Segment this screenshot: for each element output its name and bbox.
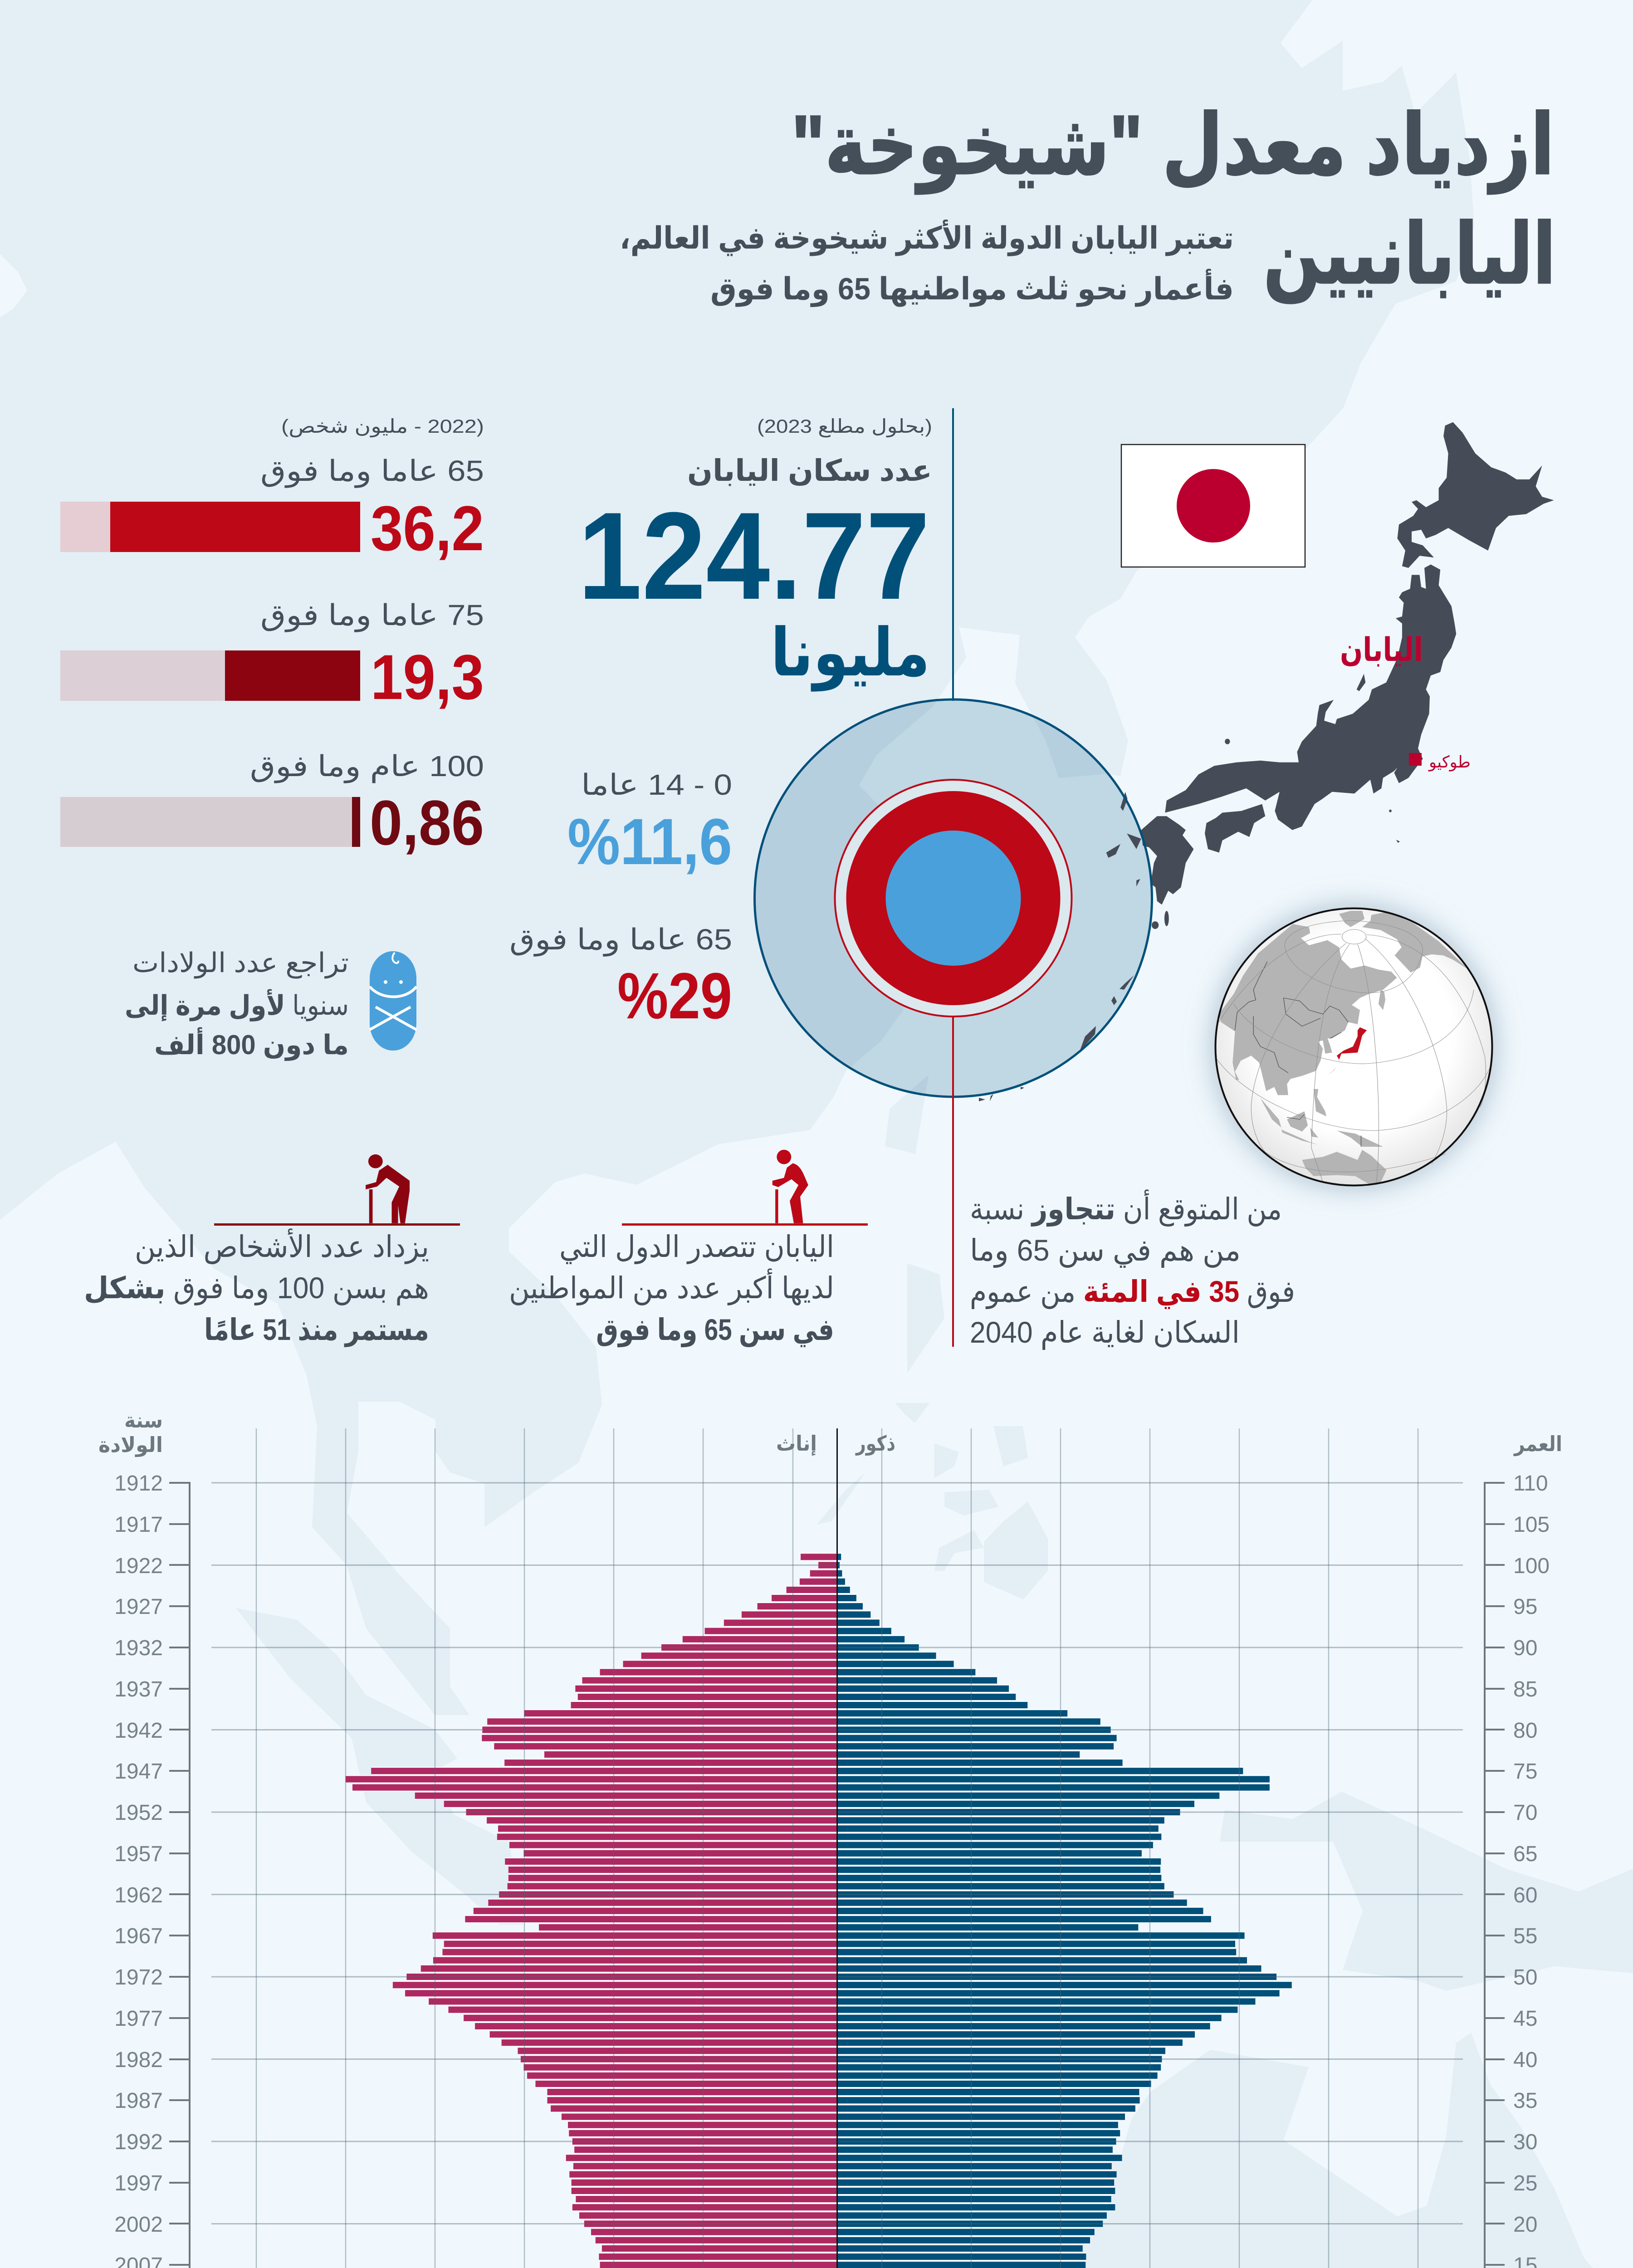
right axis: ages: 90 <box>1513 1636 1537 1660</box>
chart: population pyramid <box>98 1408 1562 2268</box>
text: centenarians: هم بسن 100 وما فوق بشكل <box>84 1271 429 1305</box>
right axis: ages: 80 <box>1513 1719 1537 1743</box>
text: births decline <box>125 948 349 1061</box>
row: 65 and over <box>60 455 484 564</box>
left axis: birth years: 1912 <box>114 1471 163 1496</box>
right axis: ages: 20 <box>1513 2213 1537 2237</box>
text: centenarians <box>84 1228 429 1347</box>
red connector line <box>952 1017 954 1347</box>
axis titles: سنة <box>124 1408 163 1432</box>
left axis: birth years: 1982 <box>114 2048 163 2072</box>
ring: 65 and over <box>846 791 1061 1005</box>
left axis: birth years: 1987 <box>114 2089 163 2113</box>
row: 75 and over <box>60 599 484 713</box>
row: 100 and over: 100 عام وما فوق <box>250 750 484 783</box>
grid <box>211 1428 1463 2268</box>
right axis: ages: 25 <box>1513 2171 1537 2195</box>
right axis: ages: 30 <box>1513 2130 1537 2154</box>
title <box>792 98 1556 304</box>
stat: 0-14: 0 - 14 عاما <box>581 768 732 801</box>
text: Japan tops list: في سن 65 وما فوق <box>596 1313 834 1348</box>
text: births decline: سنويا لأول مرة إلى <box>125 989 349 1022</box>
text: 2040 projection <box>970 1189 1295 1350</box>
map: Japan <box>979 422 1554 1101</box>
subtitle <box>620 219 1234 307</box>
flag of Japan <box>1121 445 1305 567</box>
million label: مليونا <box>771 616 930 692</box>
text: 2040 projection: من المتوقع أن تتجاوز نسبة <box>970 1189 1282 1227</box>
text: centenarians: يزداد عدد الأشخاص الذين <box>135 1228 429 1265</box>
left axis: birth years: 1977 <box>114 2007 163 2031</box>
subtitle: تعتبر اليابان الدولة الأكثر شيخوخة في العالم، <box>620 219 1234 256</box>
right axis: ages: 105 <box>1513 1513 1550 1537</box>
panel: total population <box>578 415 932 692</box>
right axis: ages: 100 <box>1513 1554 1550 1578</box>
stat: 65 and over <box>509 923 732 1032</box>
age distribution circle <box>755 699 1152 1097</box>
left axis: birth years: 1952 <box>114 1801 163 1825</box>
icon: elderly person 2 <box>214 1154 460 1226</box>
icon: baby <box>370 951 416 1051</box>
left axis: birth years: 1942 <box>114 1719 163 1743</box>
row: 100 and over: 0,86 <box>370 787 484 858</box>
axis titles: إناث <box>776 1432 817 1456</box>
right axis: ages: 110 <box>1513 1471 1548 1496</box>
panel: elderly population bars <box>60 415 484 858</box>
label: Japan: اليابان <box>1340 632 1423 668</box>
axis titles <box>98 1408 1562 1457</box>
stat: 65 and over: %29 <box>617 959 732 1032</box>
right axis: ages: 75 <box>1513 1760 1537 1784</box>
right axis: ages: 45 <box>1513 2007 1537 2031</box>
left axis: birth years: 1967 <box>114 1924 163 1948</box>
axis titles: ذكور <box>855 1432 895 1456</box>
population heading: عدد سكان اليابان <box>687 454 932 487</box>
left axis: birth years <box>114 1471 190 2268</box>
stat: 65 and over: 65 عاما وما فوق <box>509 923 732 957</box>
right axis: ages: 60 <box>1513 1883 1537 1907</box>
text: 2040 projection: السكان لغاية عام 2040 <box>970 1315 1240 1350</box>
globe <box>1209 903 1498 1191</box>
ring: 65 and over outline <box>835 780 1071 1017</box>
Tokyo marker: طوكيو <box>1428 753 1471 772</box>
right axis: ages: 40 <box>1513 2048 1537 2072</box>
left axis: birth years: 1992 <box>114 2130 163 2154</box>
right axis: ages: 70 <box>1513 1801 1537 1825</box>
row: 65 and over: 65 عاما وما فوق <box>260 455 484 488</box>
stat: 0-14: %11,6 <box>567 805 732 878</box>
icon: elderly person 1 <box>622 1150 868 1226</box>
center axis <box>836 1428 838 2268</box>
left axis: birth years: 1937 <box>114 1677 163 1701</box>
Ryukyu islands <box>979 975 1134 1101</box>
text: births decline: ما دون 800 ألف <box>154 1027 349 1061</box>
title: اليابانيين <box>1263 208 1556 304</box>
right axis: ages: 50 <box>1513 1965 1537 1989</box>
row: 100 and over <box>60 750 484 858</box>
text: Japan tops list <box>509 1230 834 1348</box>
as of note: (بحلول مطلع 2023) <box>757 415 932 438</box>
left axis: birth years: 1957 <box>114 1842 163 1866</box>
disc: 0 to 14 <box>885 831 1021 966</box>
subtitle: فأعمار نحو ثلث مواطنيها 65 وما فوق <box>710 269 1234 307</box>
left axis: birth years: 1972 <box>114 1965 163 1989</box>
right axis: ages: 35 <box>1513 2089 1537 2113</box>
left axis: birth years: 1922 <box>114 1554 163 1578</box>
age distribution circle background <box>755 699 1152 1097</box>
text: 2040 projection: من هم في سن 65 وما <box>970 1233 1241 1268</box>
right axis: ages: 95 <box>1513 1595 1537 1619</box>
text: 2040 projection: فوق 35 في المئة من عموم <box>970 1275 1295 1309</box>
bars: male <box>837 1557 1292 2268</box>
right axis: ages: 55 <box>1513 1924 1537 1948</box>
left axis: birth years: 1962 <box>114 1883 163 1907</box>
left axis: birth years: 1927 <box>114 1595 163 1619</box>
text: births decline: تراجع عدد الولادات <box>132 948 349 979</box>
blue connector line <box>952 408 954 701</box>
right axis: ages <box>1485 1471 1550 2268</box>
left axis: birth years: 2002 <box>114 2213 163 2237</box>
population figure: 124.77 <box>578 487 930 626</box>
left axis: birth years: 1932 <box>114 1636 163 1660</box>
text: Japan tops list: لديها أكبر عدد من المواطنين <box>509 1268 834 1305</box>
bars unit note: (2022 - مليون شخص) <box>281 415 484 437</box>
axis titles: العمر <box>1513 1432 1562 1456</box>
row: 75 and over: 75 عاما وما فوق <box>260 599 484 632</box>
bars: female <box>346 1557 837 2268</box>
right axis: ages: 65 <box>1513 1842 1537 1866</box>
axis titles: الولادة <box>98 1433 163 1457</box>
text: Japan tops list: اليابان تتصدر الدول التي <box>559 1230 834 1264</box>
row: 75 and over: 19,3 <box>371 641 484 713</box>
left axis: birth years: 1997 <box>114 2171 163 2195</box>
left axis: birth years: 1947 <box>114 1760 163 1784</box>
stat: 0-14 <box>567 768 732 878</box>
text: centenarians: مستمر منذ 51 عامًا <box>204 1313 429 1347</box>
row: 65 and over: 36,2 <box>371 493 484 564</box>
Tokyo marker <box>1409 753 1471 772</box>
right axis: ages: 85 <box>1513 1677 1537 1701</box>
left axis: birth years: 1917 <box>114 1513 163 1537</box>
